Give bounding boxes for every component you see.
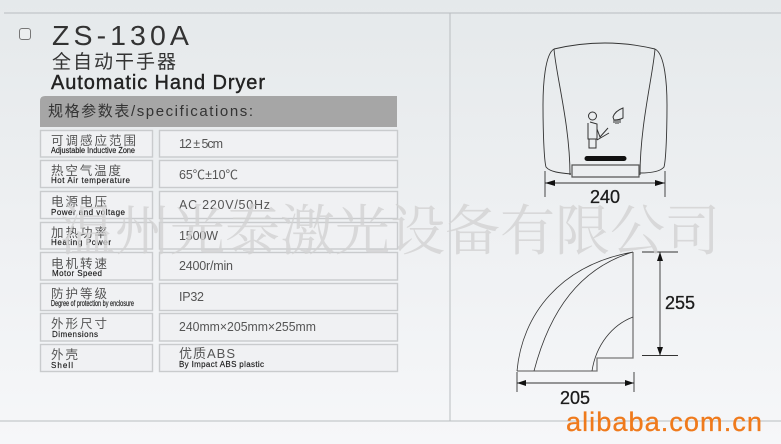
- row: adjustable inductive zone: 12 ± 5cm: [179, 137, 223, 151]
- row: dimensions: [40, 314, 398, 341]
- panel: specifications table: [40, 96, 398, 372]
- row: shell: [40, 344, 398, 372]
- sensor slot: [587, 156, 624, 161]
- row: adjustable inductive zone: 可调感应范围: [51, 133, 136, 148]
- row: power and voltage: AC 220V/50Hz: [179, 198, 270, 212]
- title: model number: ZS-130A: [52, 20, 193, 51]
- row: motor speed: 电机转速: [51, 256, 107, 271]
- row: hot air temperature: 热空气温度: [51, 163, 121, 178]
- row: adjustable inductive zone: [40, 130, 398, 157]
- icon: person drying hands: [588, 108, 623, 148]
- table header bar: 规格参数表/specifications:: [48, 103, 253, 120]
- row: degree of protection: 防护等级: [51, 286, 107, 301]
- row: shell: By Impact ABS plastic: [179, 360, 264, 369]
- dimension: height 255: [642, 252, 695, 356]
- dimension: width 240: [545, 171, 665, 207]
- table header bar: [40, 96, 397, 127]
- row: power and voltage: [40, 192, 398, 218]
- row: hot air temperature: Hot Air temperature: [51, 176, 131, 185]
- row: shell: 优质ABS: [179, 346, 235, 361]
- row: power and voltage: 电源电压: [51, 195, 107, 209]
- row: degree of protection: IP32: [179, 290, 204, 304]
- row: shell: Shell: [51, 361, 73, 370]
- watermark: alibaba domain: alibaba.com.cn: [566, 407, 763, 437]
- row: power and voltage: Power and voltage: [51, 208, 126, 217]
- row: heating power: Heating Power: [51, 238, 111, 247]
- heading: Chinese product name: 全自动干手器: [52, 51, 176, 73]
- row: motor speed: Motor Speed: [52, 269, 102, 278]
- dimension: depth 205: [517, 372, 634, 408]
- row: dimensions: 240mm×205mm×255mm: [179, 320, 316, 334]
- row: dimensions: Dimensions: [52, 330, 98, 339]
- row: heating power: 加热功率: [51, 225, 107, 240]
- row: degree of protection: [40, 284, 398, 310]
- heading: English product name: Automatic Hand Dryer: [51, 72, 265, 94]
- row: motor speed: 2400r/min: [179, 259, 233, 273]
- row: adjustable inductive zone: Adjustable Inductive Zone: [51, 146, 135, 155]
- dryer body outline: [543, 43, 667, 177]
- dimension: depth 205: 205: [560, 388, 590, 408]
- dimension: width 240: 240: [590, 187, 620, 207]
- watermark: company name: 温州光泰激光设备有限公司: [60, 201, 720, 262]
- row: hot air temperature: 65℃±10℃: [179, 168, 238, 182]
- row: heating power: 1500W: [179, 229, 218, 243]
- drawing: front view of dryer: [543, 43, 667, 207]
- side profile: [517, 252, 633, 371]
- row: heating power: [40, 222, 398, 249]
- row: degree of protection: Degree of protection by enclosure: [51, 299, 134, 308]
- row: hot air temperature: [40, 160, 398, 188]
- drawing: side view of dryer: [517, 252, 695, 408]
- row: dimensions: 外形尺寸: [51, 317, 107, 331]
- row: motor speed: [40, 252, 398, 280]
- row: shell: 外壳: [51, 348, 78, 362]
- icon: checkbox: [20, 28, 30, 40]
- dimension: height 255: 255: [665, 293, 695, 313]
